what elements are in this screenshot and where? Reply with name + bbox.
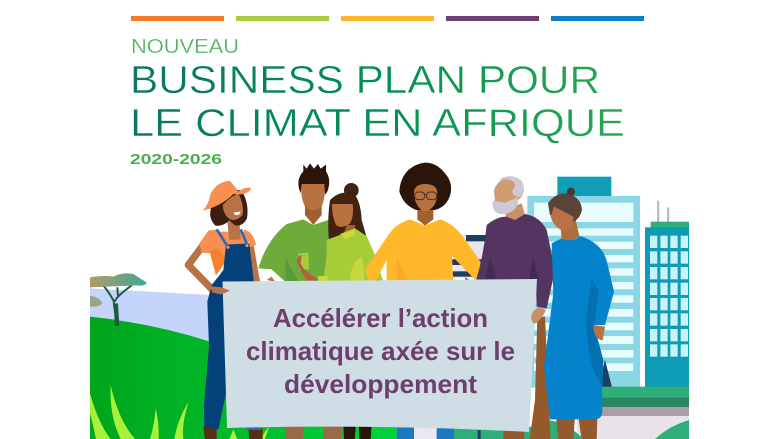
banner text (246, 303, 515, 399)
person: man in green (258, 163, 342, 439)
title: LE CLIMAT EN AFRIQUE (130, 102, 625, 145)
icon: acacia trees (90, 273, 147, 326)
person: woman in lime (318, 183, 387, 439)
title: BUSINESS PLAN POUR (130, 59, 600, 102)
title (130, 59, 625, 145)
colour bars (131, 16, 644, 21)
grass blades (90, 385, 269, 439)
banner text: climatique axée sur le (246, 336, 515, 366)
striped structure (452, 235, 486, 278)
person: man in yellow (365, 163, 482, 439)
banner text: Accélérer l’action (273, 303, 488, 333)
person: older man (476, 176, 555, 308)
hand: older man on banner (531, 307, 546, 324)
banner (222, 279, 537, 432)
icon: glasses (415, 192, 437, 200)
building: light tower (527, 177, 640, 388)
landscape left (90, 273, 390, 439)
hand: farmer on banner (209, 286, 230, 294)
infographic cover (90, 16, 689, 439)
years: 2020-2026 (130, 151, 222, 168)
banner text: développement (284, 369, 477, 399)
building: teal tower (645, 201, 692, 387)
stick and legs (503, 317, 551, 439)
ground (387, 360, 692, 439)
person: woman in blue (544, 188, 614, 439)
people left (188, 163, 387, 439)
people right (365, 163, 614, 439)
person: farmer woman (188, 181, 263, 439)
overline: nouveau: NOUVEAU (131, 35, 239, 58)
buildings and ground right (387, 177, 692, 439)
illustration (90, 163, 692, 439)
